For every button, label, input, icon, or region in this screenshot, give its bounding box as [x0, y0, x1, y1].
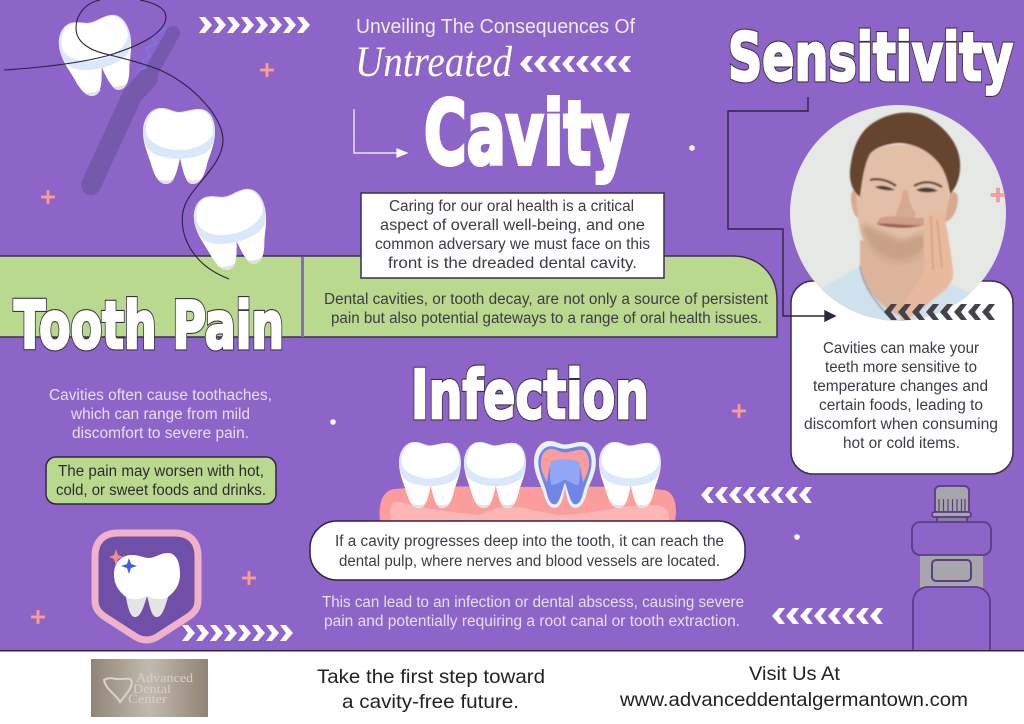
footer logo: [91, 659, 208, 717]
text block: intro box: Caring for our oral health is a critical: [389, 198, 634, 215]
callout: tooth pain green box: [46, 457, 276, 504]
text block: tooth pain description: Cavities often cause toothaches,: [49, 387, 272, 404]
text block: infection description: This can lead to an infection or dental abscess, causing severe: [322, 594, 744, 611]
icon: dental floss: [4, 0, 229, 279]
decorative chevrons: top left: [199, 17, 310, 33]
panel: sensitivity card: Cavities can make your: [823, 340, 979, 357]
dot markers: [330, 145, 800, 540]
footer logo: Dental: [133, 682, 172, 696]
panel: sensitivity card: teeth more sensitive to: [825, 359, 977, 376]
panel: sensitivity card: certain foods, leading to: [819, 397, 983, 414]
icon: shield badge with tooth: [95, 533, 198, 640]
callout: tooth pain green box: The pain may worsen with hot,: [58, 463, 264, 480]
icon: infected tooth cross-section: [534, 441, 596, 508]
decorative chevrons: beside script: [520, 56, 631, 72]
footer tagline: a cavity-free future.: [342, 691, 519, 713]
text block: intro box: front is the dreaded dental cavity.: [388, 255, 637, 272]
decorative chevrons: bottom right: [772, 608, 883, 624]
title: script word: Untreated: [355, 39, 512, 86]
heading: Tooth Pain: Tooth Pain: [14, 289, 284, 364]
footer tagline: [317, 666, 545, 713]
footer logo: Center: [128, 692, 168, 706]
arrow: title arrow: [354, 109, 407, 157]
footer website: www.advanceddentalgermantown.com: [619, 689, 968, 711]
text block: infection description: pain and potentially requiring a root canal or tooth extraction.: [324, 613, 740, 630]
icon: gums and row of teeth: [380, 441, 676, 521]
text block: tooth pain description: [49, 387, 272, 442]
text block: infection description: [322, 594, 744, 630]
panel: sensitivity card: [791, 281, 1013, 474]
text block: tooth pain description: which can range from mild: [70, 406, 250, 423]
plus sign markers: [31, 63, 1005, 624]
icon: tooth two: [143, 108, 215, 184]
text block: intro box: common adversary we must face on this: [375, 236, 650, 253]
title: Cavity: Cavity: [424, 82, 629, 185]
panel: sensitivity card: hot or cold items.: [843, 435, 960, 452]
heading: Infection: Infection: [411, 356, 649, 434]
panel: infection pill: [310, 521, 745, 580]
text block: green band: pain but also potential gateways to a range of oral health issues.: [331, 310, 762, 327]
title: intro line: Unveiling The Consequences Of: [356, 16, 635, 38]
panel: sensitivity card: temperature changes and: [813, 378, 988, 395]
text block: intro box: [361, 193, 664, 278]
icon: mouthwash bottle: [912, 486, 991, 651]
icon: toothbrush: [91, 24, 173, 185]
panel: infection pill: If a cavity progresses deep into the tooth, it can reach the: [335, 533, 724, 550]
callout: tooth pain green box: cold, or sweet foods and drinks.: [56, 482, 266, 499]
text block: green band: Dental cavities, or tooth decay, are not only a source of persistent: [324, 291, 769, 308]
panel: sensitivity card: discomfort when consuming: [804, 416, 998, 433]
heading: Tooth Pain: Tooth Pain: [14, 289, 284, 364]
text block: intro box: aspect of overall well-being, and one: [380, 217, 645, 234]
panel: green band: [0, 256, 777, 337]
text block: tooth pain description: discomfort to severe pain.: [72, 425, 249, 442]
footer logo: Advanced: [136, 671, 194, 685]
decorative chevrons: badge: [182, 625, 293, 641]
footer website: Visit Us At: [749, 663, 841, 685]
heading: Infection: Infection: [411, 356, 649, 434]
photo: man with toothache: [785, 100, 1011, 326]
text block: green band: [324, 291, 769, 327]
panel: footer: [0, 650, 1024, 724]
icon: tooth three: [189, 185, 277, 275]
decorative chevrons: mid right: [701, 487, 812, 503]
decorative chevrons: over photo: [884, 304, 995, 320]
panel: infection pill: dental pulp, where nerves and blood vessels are located.: [339, 553, 720, 570]
connector arrow: sensitivity: [728, 97, 835, 321]
footer tagline: Take the first step toward: [317, 666, 545, 688]
icon: tooth one: [54, 11, 142, 101]
footer website: [619, 663, 968, 711]
